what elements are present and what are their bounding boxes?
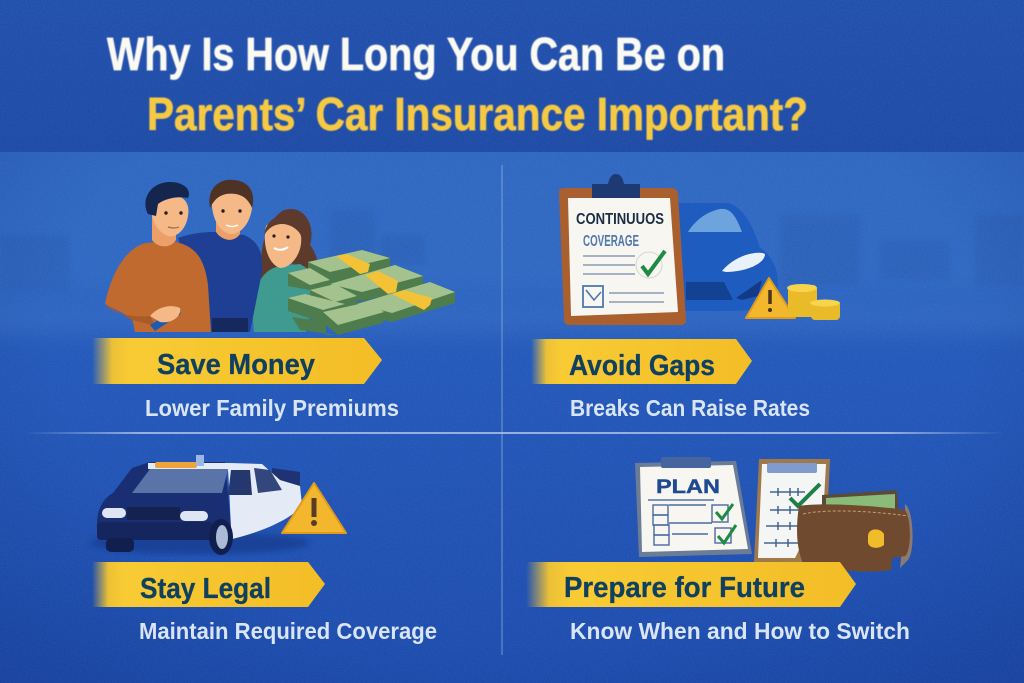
ribbon: save money: Save Money [157, 349, 315, 381]
panel: avoid gaps [531, 174, 840, 421]
illustration: police car [90, 455, 310, 555]
middle man [178, 180, 262, 332]
icon: warning triangle [746, 278, 795, 318]
header band [0, 0, 1024, 152]
left man [105, 182, 211, 332]
title: Why Is How Long You Can Be on [107, 28, 725, 80]
woman [253, 209, 318, 332]
illustration: checklist [754, 459, 830, 562]
subtitle: avoid gaps: Breaks Can Raise Rates [570, 395, 810, 421]
title: Parents’ Car Insurance Important? [147, 88, 808, 140]
illustration: plan clipboard [635, 457, 752, 557]
title [107, 28, 808, 140]
subtitle: prepare for future: Know When and How to Switch [570, 618, 910, 644]
illustration: clipboard: COVERAGE [583, 233, 639, 250]
ribbon: save money [92, 338, 382, 384]
illustration: clipboard: CONTINUUOS [576, 211, 664, 228]
ribbon: avoid gaps: Avoid Gaps [569, 350, 715, 382]
illustration: blue car [678, 203, 778, 311]
illustration: cash stacks [288, 250, 455, 335]
illustration: clipboard [559, 174, 686, 325]
ribbon: prepare for future [526, 562, 856, 607]
panel: stay legal [90, 455, 437, 644]
ribbon: avoid gaps [531, 339, 752, 384]
illustration: family [105, 180, 318, 332]
icon: coins [787, 284, 840, 320]
ribbon: stay legal [92, 562, 325, 607]
panel: save money [92, 180, 455, 421]
grid dividers [24, 165, 1004, 655]
subtitle: save money: Lower Family Premiums [145, 395, 399, 421]
illustration: plan clipboard: PLAN [656, 477, 720, 498]
icon: warning triangle [282, 483, 346, 533]
ribbon: prepare for future: Prepare for Future [564, 572, 805, 604]
ribbon: stay legal: Stay Legal [140, 573, 271, 605]
panel: prepare for future [526, 457, 913, 644]
illustration: wallet [797, 490, 913, 572]
subtitle: stay legal: Maintain Required Coverage [139, 618, 437, 644]
